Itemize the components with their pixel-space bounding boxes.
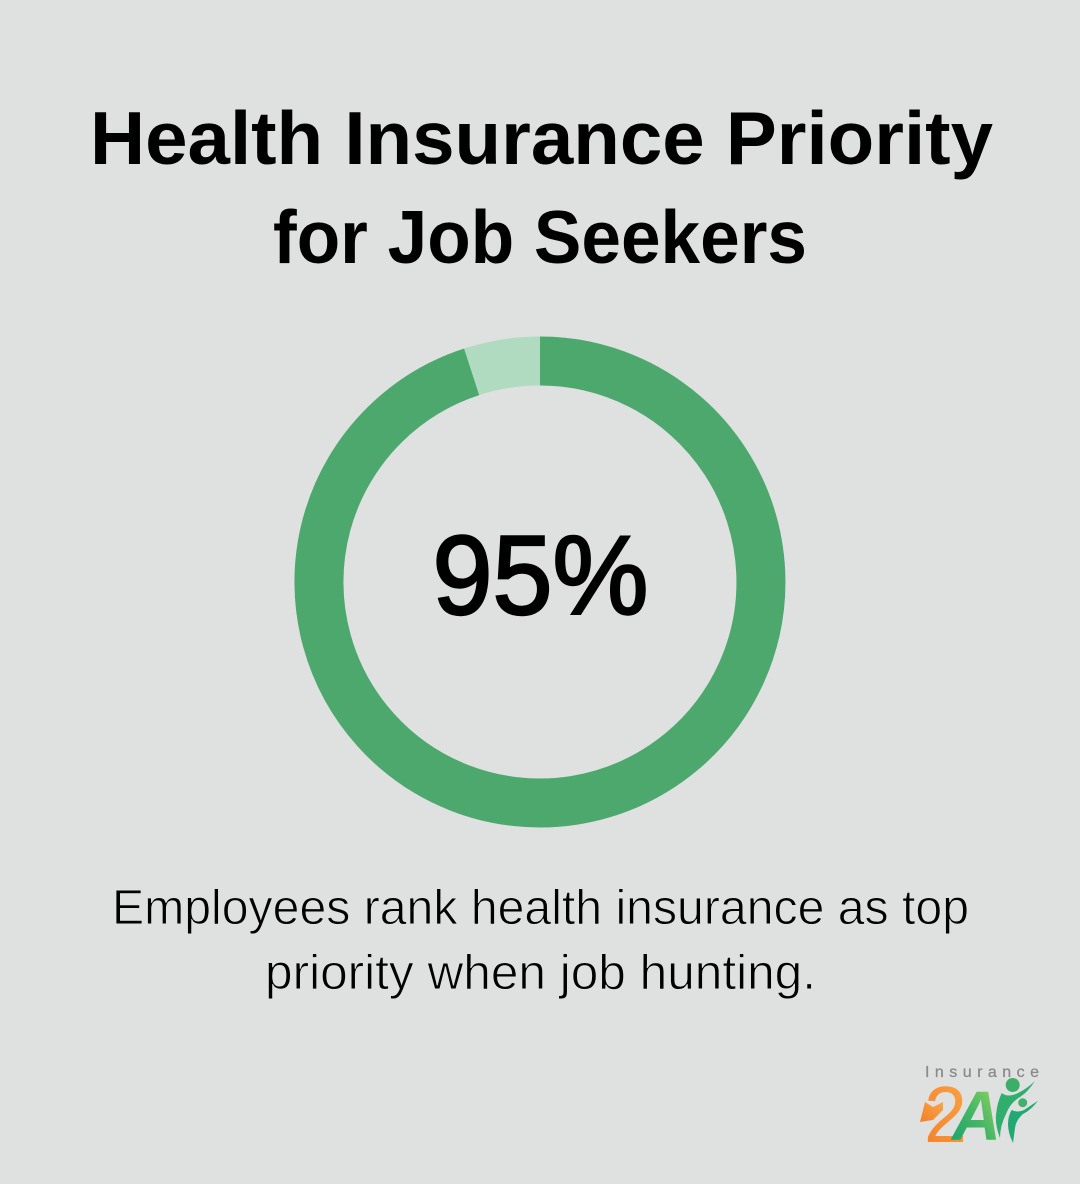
logo numeral 2: 2 bbox=[924, 1070, 967, 1159]
description text bbox=[112, 880, 969, 1000]
percentage value: 95% bbox=[432, 513, 648, 638]
description text: Employees rank health insurance as top bbox=[112, 880, 969, 935]
logo figure: large person bbox=[996, 1078, 1035, 1138]
logo: Insurance 2A bbox=[920, 1064, 1039, 1159]
title: for Job Seekers bbox=[273, 195, 807, 279]
description text: priority when job hunting. bbox=[265, 945, 816, 1000]
logo heart arrow bbox=[920, 1102, 943, 1122]
logo letter A: A bbox=[950, 1077, 1001, 1155]
title: Health Insurance Priority bbox=[90, 96, 993, 180]
ring segment: remaining 5 percent bbox=[472, 361, 540, 372]
donut chart: 95% bbox=[319, 361, 761, 803]
title bbox=[90, 96, 993, 279]
logo figure: small person bbox=[1008, 1098, 1038, 1143]
ring segment: 95 percent bbox=[319, 361, 761, 803]
logo wordmark: Insurance bbox=[925, 1064, 1039, 1081]
